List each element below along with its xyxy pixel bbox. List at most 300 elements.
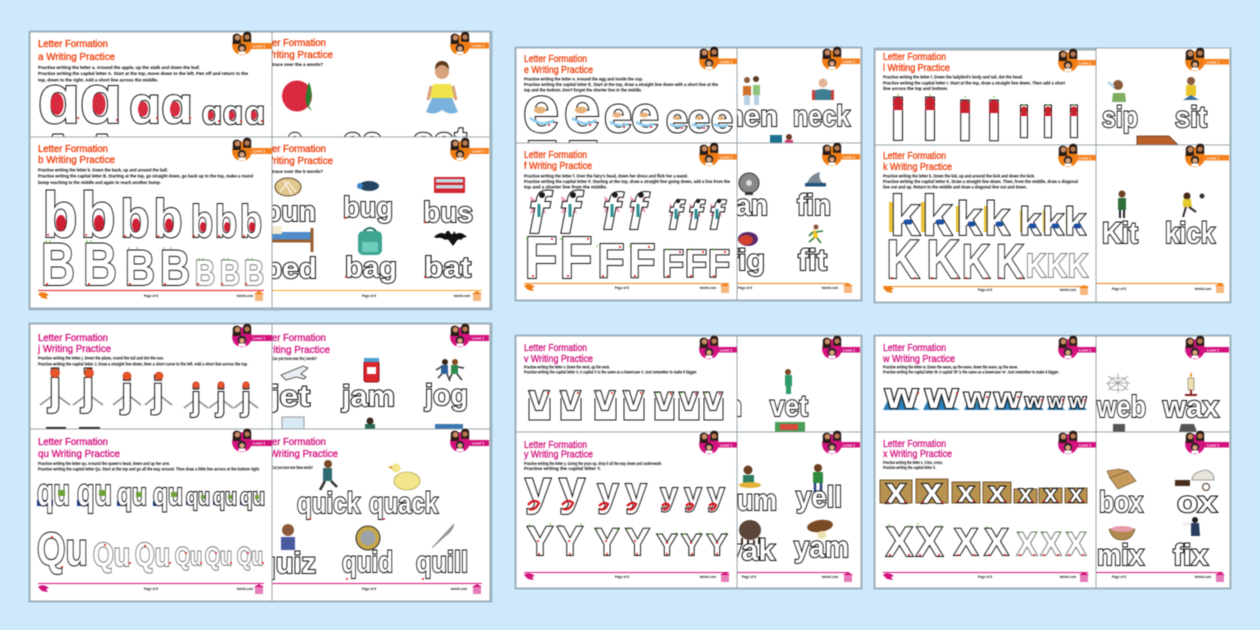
fairy wings	[530, 196, 722, 217]
practice letters l: l	[957, 90, 973, 152]
practice letters x: x	[886, 470, 906, 511]
footer	[524, 572, 730, 582]
practice letters a	[38, 60, 265, 138]
icon: bag	[358, 228, 382, 255]
words: quid	[342, 546, 393, 579]
heading	[882, 343, 955, 365]
icon: man fixing	[1183, 517, 1200, 536]
words: quack	[369, 487, 438, 520]
icon: vet	[785, 369, 792, 394]
level badge	[699, 47, 737, 70]
heading: Letter Formation	[38, 144, 108, 155]
heading: x Writing Practice	[883, 449, 952, 460]
practice capitals B: B	[125, 240, 155, 296]
capital A tops	[38, 122, 122, 184]
icon: yam	[806, 518, 834, 539]
practice letters b: b	[120, 189, 150, 249]
practice capitals B: B	[41, 231, 75, 298]
practice capitals F: F	[708, 243, 730, 286]
lower icons	[1113, 424, 1197, 432]
practice letters a: ɑ	[161, 77, 193, 135]
practice letters e: e	[666, 97, 688, 141]
practice capitals X	[886, 518, 1087, 565]
footer	[1096, 572, 1225, 582]
practice letters a: ɑ	[223, 94, 243, 131]
sheet: j words	[255, 324, 490, 429]
practice capitals B	[41, 231, 264, 298]
footer: twinkl.com	[237, 294, 253, 298]
footer: Page of 8	[1112, 287, 1126, 291]
footer	[272, 583, 482, 594]
words: wax	[1162, 389, 1220, 424]
icon: bun	[275, 178, 301, 196]
capital E tops: E	[566, 129, 600, 193]
practice capitals K: K	[1047, 247, 1067, 284]
footer	[38, 290, 264, 301]
practice letters x: x	[922, 470, 942, 511]
footer: twinkl.com	[1195, 575, 1211, 579]
sheet: k words	[1096, 144, 1230, 302]
instructions: Practise writing the capital letter F. Starting at the top, draw a straight line going down, add a line from the	[524, 179, 730, 184]
practice letters x: x	[1044, 481, 1058, 508]
instructions: line across the top and bottom.	[883, 86, 948, 91]
icon: mixing bowl	[1109, 526, 1135, 540]
footer: Page of 8	[978, 288, 992, 292]
footer: twinkl.com	[1060, 575, 1076, 579]
sheet: qu practice	[30, 429, 272, 601]
instructions	[38, 356, 248, 366]
practice letters qu: qu	[240, 484, 265, 511]
instructions: Practise writing the letter f. Over the fairy's head, down her dress and flick her a wand.	[524, 174, 688, 178]
heading	[256, 437, 338, 460]
icon: bed	[272, 226, 312, 252]
practice letters y: y	[660, 476, 678, 512]
instruction: Can you trace over these words?	[272, 465, 313, 470]
heading: Letter Formation	[883, 343, 946, 354]
heading	[38, 437, 120, 460]
level badge	[450, 429, 489, 452]
icon: jet	[281, 366, 308, 380]
heading: Letter Formation	[256, 333, 326, 344]
practice letters b	[42, 179, 262, 251]
practice letters l	[890, 88, 1080, 153]
footer: Page of 8	[362, 294, 376, 298]
words: fin	[797, 189, 831, 222]
capital A tops: A	[82, 122, 122, 184]
level badge: Level 1	[1079, 62, 1091, 66]
footer: twinkl.com	[451, 587, 467, 591]
instructions	[883, 460, 943, 470]
level badge	[232, 138, 272, 161]
words	[722, 481, 849, 567]
words: box	[1099, 486, 1143, 519]
practice letters v: v	[529, 377, 549, 418]
practice letters l: l	[986, 90, 1002, 152]
words clipped: sat	[413, 119, 467, 160]
practice letters j: j	[120, 368, 133, 415]
words: neck	[793, 100, 850, 133]
level badge: Level 1	[472, 336, 484, 340]
sheet: l words	[1096, 48, 1230, 145]
practice letters qu: qu	[186, 484, 210, 511]
sheet: v words	[702, 336, 861, 432]
practice capitals K: K	[996, 236, 1024, 289]
level badge: Level 1	[720, 60, 732, 64]
practice capitals K: K	[1068, 247, 1088, 284]
practice letters k	[890, 184, 1086, 248]
instructions	[883, 174, 1078, 190]
practice letters j: j	[215, 380, 226, 418]
practice letters k: k	[890, 184, 920, 248]
footer	[737, 572, 853, 582]
instructions: Practise writing the letter l. Down the ladybird's body and tail, dot the head.	[883, 74, 1023, 80]
sheet: qu words	[256, 429, 490, 601]
practice capitals K: K	[962, 236, 990, 289]
sun dots	[50, 368, 249, 388]
heading: b Writing Practice	[38, 155, 115, 166]
instructions	[524, 174, 730, 190]
level badge	[450, 138, 489, 161]
sheet: x practice	[875, 431, 1096, 588]
practice capitals B: B	[195, 254, 215, 293]
practice capitals X: X	[954, 522, 979, 564]
practice letters l: l	[1018, 98, 1030, 147]
icon: coin	[356, 526, 380, 550]
practice letters qu: qu	[117, 476, 147, 512]
footer	[38, 583, 264, 594]
level badge	[232, 324, 272, 347]
words: sit	[1175, 101, 1207, 134]
instructions: Practise writing the capital letter W. A capital 'W' is the same as a lowercase 'w'. Just remember to make it bigger.	[883, 370, 1059, 374]
sheet: b words	[256, 137, 490, 308]
words: ox	[1177, 486, 1217, 519]
heading: Letter Formation	[524, 440, 587, 451]
heading: b Writing Practice	[256, 156, 333, 167]
heading	[524, 440, 593, 460]
heading: Letter Formation	[524, 54, 587, 65]
heading: Letter Formation	[524, 343, 587, 354]
practice letters y: y	[684, 476, 702, 512]
footer: Page of 8	[362, 587, 376, 591]
heading: qu Writing Practice	[38, 449, 120, 460]
treasure boxes	[880, 479, 1087, 503]
words	[718, 100, 850, 133]
practice letters w	[884, 375, 1086, 416]
footer	[524, 283, 730, 293]
footer: Page of 8	[978, 575, 992, 579]
sheet: l practice	[875, 49, 1096, 153]
practice letters x: x	[1019, 481, 1033, 508]
practice capitals Y: Y	[595, 522, 619, 564]
practice letters k: k	[956, 192, 982, 245]
practice letters e: e	[688, 97, 710, 141]
practice letters w: w	[884, 375, 919, 416]
words	[726, 189, 831, 277]
footer: Page of 8	[742, 575, 756, 579]
heading	[38, 39, 115, 63]
sheet: b practice	[30, 137, 272, 308]
instructions	[38, 461, 260, 472]
words clipped	[287, 119, 467, 160]
instructions	[524, 461, 662, 471]
icon: sitting boy	[1183, 77, 1199, 100]
practice letters f: f	[709, 194, 726, 238]
practice letters b: b	[240, 196, 262, 247]
level badge	[232, 32, 272, 55]
heading: Letter Formation	[524, 150, 587, 161]
icon: quill	[432, 524, 454, 548]
footer: Page of 8	[144, 587, 158, 591]
blue waves	[883, 390, 1087, 410]
instructions	[883, 74, 1065, 91]
footer: twinkl.com	[822, 286, 838, 290]
practice letters qu	[37, 472, 265, 514]
instructions	[524, 76, 718, 92]
footer	[737, 283, 853, 293]
ball fills	[56, 215, 255, 232]
heading	[524, 54, 593, 76]
level badge	[1058, 144, 1096, 167]
practice capitals B: B	[244, 254, 264, 293]
words clipped: a	[287, 119, 304, 160]
instructions: Practise writing the capital letter V. A capital V is the same as a lowercase V. Just remember to make it bigger.	[524, 370, 697, 374]
practice letters j: j	[240, 380, 251, 418]
sheet: v practice	[516, 336, 737, 432]
words: yak	[725, 534, 775, 567]
instructions: Practise writing the letter qu. Around the queen's head, down and up her arm.	[38, 461, 170, 466]
footer: twinkl.com	[700, 575, 716, 579]
heading	[524, 150, 592, 172]
heading	[883, 439, 952, 460]
practice capitals Qu: Qu	[205, 543, 232, 571]
footer: twinkl.com	[700, 286, 716, 290]
instructions	[524, 364, 697, 374]
practice letters l: l	[1068, 98, 1080, 147]
egg fills and blue bands	[534, 106, 724, 120]
icon: shark fin	[805, 172, 826, 186]
instructions: top and the bottom. Don't forget the shorter line in the middle.	[524, 88, 642, 92]
practice letters x	[886, 470, 1083, 511]
heading: Letter Formation	[38, 39, 108, 50]
practice capitals K: K	[926, 228, 960, 290]
sheet: f words	[726, 143, 861, 300]
words: yam	[794, 531, 849, 564]
heading	[38, 144, 115, 166]
level badge: Level 1	[1079, 444, 1091, 448]
instructions: Practise writing the letter k. Down the kid, up and around the kick and down the kick.	[883, 174, 1035, 178]
words: mix	[1097, 539, 1144, 572]
practice letters l: l	[922, 88, 938, 153]
practice letters v	[529, 377, 723, 418]
panel group: v and y pink worksheets	[514, 334, 862, 590]
instructions: Practise writing the capital letter J. Draw a straight line down, then a short curve to the left. Add a short line across the top.	[38, 362, 248, 366]
sheet: e words	[718, 47, 861, 144]
instructions: Practise writing the capital letter K. Draw a straight line down. Then, from the middle, draw a diagonal	[883, 179, 1078, 184]
practice capitals F: F	[685, 243, 707, 286]
heading	[37, 333, 111, 355]
practice letters x: x	[1069, 481, 1083, 508]
instructions	[883, 364, 1059, 374]
practice letters x: x	[958, 476, 975, 509]
level badge: Level 1	[843, 444, 855, 448]
practice letters k: k	[922, 184, 952, 248]
words: Kit	[1102, 217, 1138, 250]
character heads and scarves	[893, 97, 1078, 116]
icon: Kit	[1118, 190, 1126, 218]
practice capitals X: X	[1017, 526, 1038, 562]
level badge: Level 1	[720, 156, 732, 160]
words: quick	[297, 487, 360, 520]
level badge: Level 1	[1079, 156, 1091, 160]
outlined words: bat	[424, 252, 471, 284]
words: jet	[269, 380, 310, 413]
practice capitals F: F	[628, 235, 656, 288]
practice letters b: b	[215, 196, 237, 247]
level badge	[822, 336, 860, 359]
panel group: j and qu pink worksheets	[28, 322, 492, 602]
icon: sitting boy	[426, 61, 458, 114]
footer: Page of 8	[144, 294, 158, 298]
icon: rug	[1137, 136, 1178, 145]
footer: twinkl.com	[454, 294, 470, 298]
instructions: Practise writing the letter e. Around the egg and inside the cup.	[524, 76, 643, 82]
practice capitals F: F	[662, 243, 684, 286]
level badge: Level 1	[1207, 348, 1219, 352]
panel group: a and b orange worksheets	[28, 30, 492, 310]
icon: jam jar	[364, 358, 379, 382]
level badge: Level 1	[843, 156, 855, 160]
instruction: trace over the a words?	[272, 62, 323, 67]
level badge: Level 1	[253, 336, 265, 340]
footer: Page of 8	[738, 286, 752, 290]
heading: j Writing Practice	[255, 345, 330, 356]
practice capitals Y: Y	[707, 529, 727, 562]
instructions: Practise writing the capital letter Qu. Start at the top and go all the way around. Then draw a little line across at the bottom right.	[38, 466, 260, 472]
heading: v Writing Practice	[524, 354, 593, 365]
practice letters l: l	[890, 88, 906, 153]
sheet: x words	[1096, 431, 1230, 588]
panel group: l and k orange worksheets	[874, 48, 1232, 304]
practice capitals Y: Y	[657, 529, 677, 562]
practice capitals X: X	[984, 522, 1009, 564]
heading: l Writing Practice	[883, 63, 950, 74]
practice letters qu: qu	[37, 472, 70, 514]
footer: Page of 8	[615, 286, 629, 290]
instructions: Practise writing the letter j. Down the plane, round the tail and dot the sun.	[38, 356, 164, 360]
practice capitals X: X	[1041, 526, 1062, 562]
icon: yak	[739, 520, 761, 544]
instructions: Practise writing the letter y. Going the yoyo up, drop it all the way down and underneath.	[524, 461, 662, 466]
level badge: Level 1	[472, 44, 484, 48]
practice capitals Y: Y	[626, 522, 650, 564]
instructions: Practise writing the letter x. Criss, cross.	[883, 460, 943, 465]
icon: spider web	[1106, 373, 1130, 393]
instructions: Practise writing the capital letter A. Start at the top, move down to the left. Pen off and return to the	[38, 71, 248, 76]
level badge	[450, 32, 489, 55]
practice letters v: v	[655, 380, 674, 417]
level badge	[822, 431, 860, 454]
footer: twinkl.com	[237, 587, 253, 591]
level badge: Level 1	[253, 150, 265, 154]
practice letters k: k	[1064, 201, 1086, 244]
icon: fan	[739, 173, 759, 195]
level badge	[1185, 431, 1229, 454]
words: sip	[1102, 101, 1138, 134]
practice capitals F: F	[560, 225, 592, 291]
icon: neck	[812, 78, 834, 100]
practice letters y: y	[626, 470, 647, 514]
instructions: Practise writing the capital letter Y.	[524, 466, 601, 471]
words: quill	[416, 546, 468, 579]
words: quiz	[258, 547, 316, 580]
footer: twinkl.com	[1060, 288, 1076, 292]
words: fan	[726, 189, 768, 222]
practice letters j: j	[80, 360, 95, 413]
practice letters v: v	[679, 380, 698, 417]
icon: running boy	[320, 460, 337, 490]
icon: bug	[357, 181, 379, 191]
practice letters e: e	[604, 86, 632, 143]
words: vet	[770, 390, 808, 423]
instructions: line out and up. Return to the middle and draw a diagonal line out and down.	[883, 184, 1027, 190]
practice capitals Y: Y	[557, 518, 583, 564]
practice letters w: w	[963, 382, 991, 415]
outlined words: bun	[264, 196, 316, 228]
instructions: bump reaching to the middle and again to reach another bump.	[38, 180, 161, 185]
sheet: j practice	[30, 324, 272, 429]
practice letters f	[528, 181, 726, 246]
heading	[883, 52, 950, 74]
heading: a Writing Practice	[256, 50, 333, 61]
words	[702, 390, 808, 423]
level badge	[699, 336, 737, 359]
heading	[255, 333, 330, 356]
heading: Letter Formation	[883, 151, 946, 162]
heading: Letter Formation	[256, 38, 326, 49]
icon: boy with quiz	[281, 524, 295, 550]
level badge	[699, 431, 737, 454]
outlined words: bug	[343, 192, 393, 224]
capital J tops	[46, 427, 100, 429]
fairy heads	[539, 192, 721, 203]
outlined words	[264, 192, 473, 285]
sheet: y practice	[516, 431, 737, 588]
heading: Letter Formation	[256, 144, 326, 155]
sheet: f practice	[516, 143, 737, 300]
letter accents	[58, 490, 259, 499]
heading: f Writing Practice	[524, 161, 592, 172]
practice letters qu: qu	[77, 472, 112, 514]
words: web	[1096, 389, 1146, 424]
heading: Letter Formation	[256, 437, 326, 448]
instructions: Practise writing the letter v. Down the neck, up the neck.	[524, 364, 610, 370]
sheet: e practice	[516, 47, 737, 193]
icon: girl drinking	[1108, 80, 1126, 102]
queen figure fills	[37, 500, 251, 506]
instructions: Practise writing the capital letter E. Start at the top, draw a straight line down with a short line at the	[524, 82, 718, 87]
icon: candle wax	[1185, 372, 1197, 395]
heading: a Writing Practice	[38, 52, 115, 63]
practice letters v: v	[560, 377, 581, 418]
words: fig	[728, 244, 765, 277]
practice letters a: ɑ	[129, 77, 161, 135]
words	[1102, 217, 1215, 250]
lower image tops	[282, 417, 463, 429]
practice letters j: j	[47, 360, 62, 413]
practice capitals F	[524, 225, 730, 291]
yoyo colours	[528, 501, 716, 510]
practice capitals K	[886, 228, 1088, 290]
